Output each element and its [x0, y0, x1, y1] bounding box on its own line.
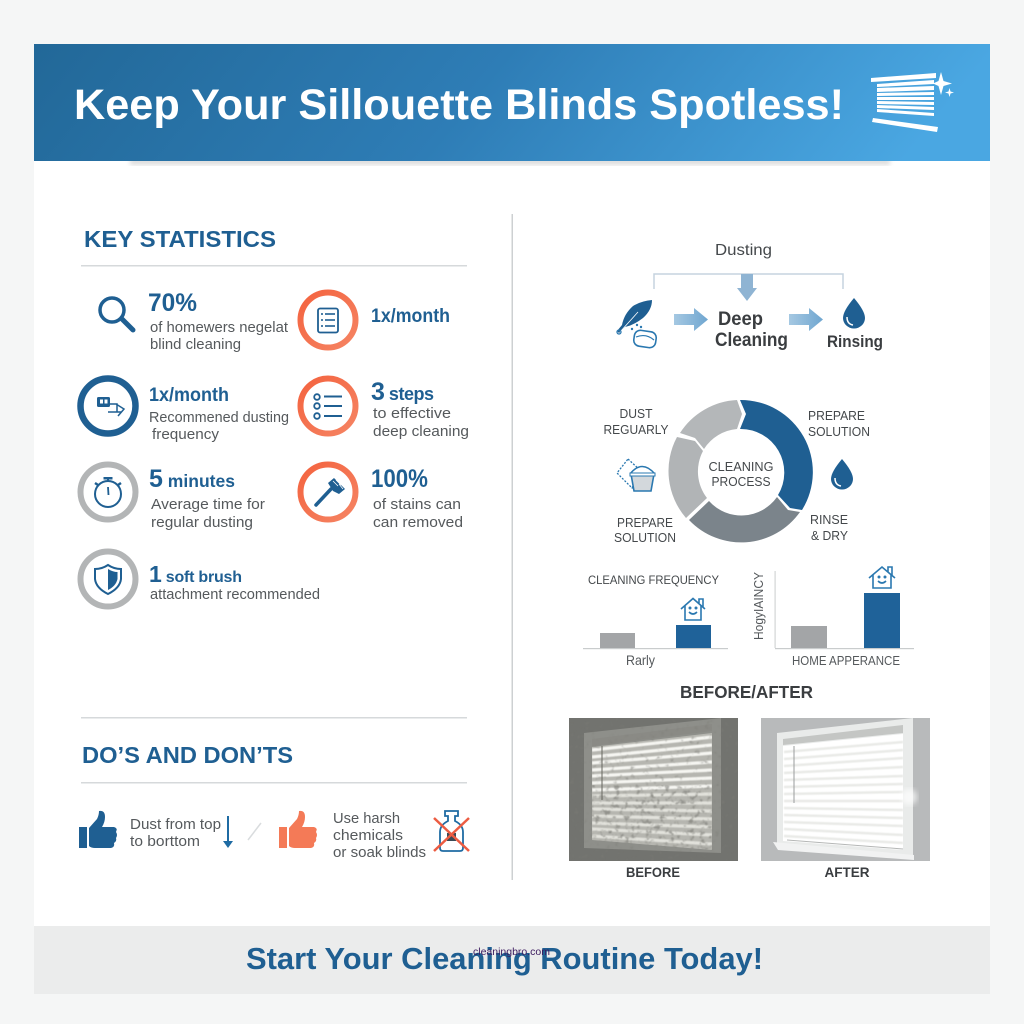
- arrow: to deep cleaning: [674, 308, 708, 331]
- flow diagram: dusting to rinsing: Dusting: [715, 242, 772, 259]
- icon: bucket and cloth: [617, 459, 655, 491]
- text: AFTER: [824, 864, 870, 880]
- icon: water drop small: [831, 459, 853, 490]
- icon: magnifier: [100, 298, 133, 330]
- icon: sparkling blinds: [871, 72, 954, 132]
- do: dust top to bottom: Dust from top: [130, 817, 221, 833]
- icon: crossed-out bottle: [434, 811, 469, 851]
- stat: 70 percent: blind cleaning: [150, 337, 241, 353]
- watermark: cleaningbro.com: [473, 946, 550, 958]
- icon: stopwatch ring: [80, 464, 136, 520]
- stat: 1x/month dusting: [80, 378, 289, 443]
- stat: 1x/month document: 1x/month: [371, 306, 450, 327]
- call to action: Start Your Cleaning Routine Today!: [246, 941, 763, 976]
- stat: 1x/month dusting: Recommened dusting: [149, 410, 289, 426]
- icon: smiling house: [681, 598, 705, 620]
- footer band: [34, 926, 990, 994]
- arrow: down to deep cleaning: [737, 274, 757, 301]
- photo: clean blinds after: [761, 718, 930, 861]
- donut label: dust regularly: DUST: [620, 406, 653, 421]
- stat: 1 soft brush: [80, 552, 320, 606]
- stat: 5 minutes: 5 minutes: [149, 465, 235, 493]
- bar chart: home appearance: HOME APPERANCE: [792, 653, 900, 668]
- donut label: prepare solution left: PREPARE: [617, 515, 673, 530]
- stat: 1x/month document: [300, 292, 450, 348]
- icon: document ring: [300, 292, 356, 348]
- flow diagram: dusting to rinsing: Deep: [718, 309, 763, 330]
- stat: 3 steps: to effective: [373, 406, 451, 422]
- don't: harsh chemicals: [279, 811, 469, 861]
- stat: 70 percent: of homewers negelat: [150, 320, 288, 336]
- icon: water drop: [843, 298, 865, 328]
- icon: checklist ring: [300, 378, 356, 434]
- donut chart: cleaning process: [668, 400, 813, 542]
- text: BEFORE: [626, 864, 680, 880]
- do: dust top to bottom: [79, 811, 233, 850]
- stat: 1 soft brush: 1 soft brush: [149, 561, 242, 587]
- stat: 1x/month dusting: 1x/month: [149, 385, 229, 406]
- photo: dirty blinds before: [569, 718, 738, 861]
- icon: orange thumb up: [279, 811, 317, 848]
- stat: 1 soft brush: attachment recommended: [150, 587, 320, 603]
- icon: shield ring: [80, 552, 136, 606]
- donut label: prepare solution right: PREPARE: [808, 408, 865, 423]
- flow diagram: dusting to rinsing: [617, 242, 883, 351]
- stat: 5 minutes: regular dusting: [151, 515, 253, 531]
- don't: harsh chemicals: Use harsh: [333, 811, 400, 827]
- stat: 70 percent: 70%: [148, 289, 197, 317]
- donut label: prepare solution right: SOLUTION: [808, 424, 870, 439]
- do: dust top to bottom: to borttom: [130, 834, 200, 850]
- heading: before/after: BEFORE/AFTER: [680, 682, 813, 702]
- donut label: rinse and dry: RINSE: [810, 512, 848, 527]
- icon: blue thumb up: [79, 811, 117, 848]
- donut label: prepare solution left: SOLUTION: [614, 530, 676, 545]
- header band: [34, 44, 990, 165]
- donut chart: cleaning process: PROCESS: [712, 474, 771, 489]
- stat: 3 steps: [300, 378, 469, 440]
- heading: key statistics: KEY STATISTICS: [84, 226, 276, 252]
- bar chart: cleaning frequency: [583, 573, 728, 668]
- stat: 100 percent: can removed: [373, 515, 463, 531]
- icon: feather and sponge: [617, 300, 657, 348]
- stat: 5 minutes: [80, 464, 265, 531]
- bar chart: cleaning frequency: CLEANING FREQUENCY: [588, 573, 719, 587]
- stat: 1x/month dusting: frequency: [152, 427, 220, 443]
- icon: brush ring: [300, 464, 356, 520]
- icon: smiling house: [869, 567, 895, 588]
- heading: do's and don'ts: DO’S AND DON’TS: [82, 742, 293, 768]
- flow diagram: dusting to rinsing: Cleaning: [715, 330, 788, 351]
- flow diagram: dusting to rinsing: Rinsing: [827, 333, 883, 351]
- donut chart: cleaning process: CLEANING: [708, 459, 774, 474]
- stat: 5 minutes: Average time for: [151, 497, 265, 513]
- title: Keep Your Sillouette Blinds Spotless!: [74, 81, 844, 129]
- arrow: down: [223, 816, 233, 848]
- stat: 3 steps: 3 steps: [371, 378, 434, 406]
- stat: 100 percent: 100%: [371, 465, 428, 493]
- stat: 100 percent: of stains can: [373, 497, 461, 513]
- donut label: rinse and dry: & DRY: [811, 528, 848, 543]
- y axis label: HogyIAINCY: [752, 571, 766, 640]
- don't: harsh chemicals: or soak blinds: [333, 845, 426, 861]
- stat: 3 steps: deep cleaning: [373, 424, 469, 440]
- stat: 70 percent: [100, 289, 288, 353]
- don't: harsh chemicals: chemicals: [333, 828, 403, 844]
- bar chart: home appearance: [752, 567, 914, 668]
- donut label: dust regularly: REGUARLY: [604, 422, 669, 437]
- stat: 100 percent: [300, 464, 463, 531]
- icon: schedule ring: [80, 378, 136, 434]
- arrow: to rinsing: [789, 308, 823, 331]
- bar chart: cleaning frequency: Rarly: [626, 652, 655, 668]
